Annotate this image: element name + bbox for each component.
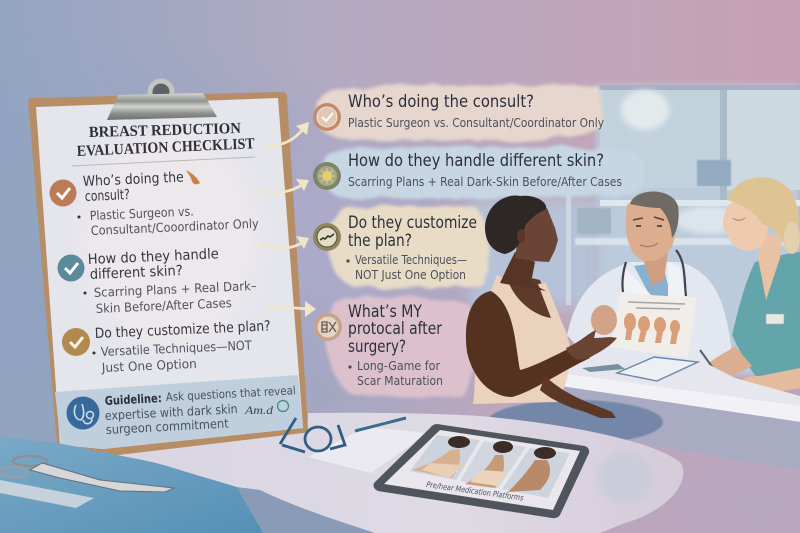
guideline: Am.d (244, 403, 274, 417)
blue surgical cloth (0, 437, 263, 533)
item: consult (50, 170, 260, 238)
item: skin: different skin? (89, 263, 183, 283)
item: customize: Do they customize the plan? (94, 318, 271, 342)
name badge (766, 314, 784, 324)
text: Scarring Plans + Real Dark-Skin Before/After Cases (348, 174, 622, 189)
illustration: patient (466, 196, 663, 444)
guideline band (55, 375, 303, 449)
bullet text (346, 252, 467, 282)
icon: wave badge (313, 223, 341, 251)
item: skin: Scarring Plans + Real Dark– (93, 278, 257, 300)
clipboard board (28, 92, 308, 460)
heading line two: protocal after (348, 319, 442, 338)
item: skin (58, 246, 257, 316)
surgical scissors (0, 456, 174, 492)
item: skin: Skin Before/After Cases (95, 295, 232, 316)
guideline: surgeon commitment (105, 416, 229, 437)
guideline: Guideline: (104, 391, 162, 408)
arrow 2 (260, 179, 309, 192)
item: customize (62, 318, 271, 375)
clipboard paper (36, 98, 303, 449)
title: BREAST REDUCTION (89, 120, 241, 141)
heading: Do they customize (348, 213, 477, 232)
clipboard (28, 81, 308, 460)
gauze (0, 480, 94, 508)
bullet text: Scar Maturation (357, 373, 443, 388)
illustration: nurse (700, 177, 800, 396)
illustration: doctor (567, 192, 732, 372)
illustration: anatomical chart (591, 293, 697, 358)
item: customize: Just One Option (101, 356, 197, 375)
icon: sun badge (313, 162, 341, 190)
title (76, 120, 256, 160)
reading glasses (280, 418, 345, 452)
arrow 3 (260, 236, 309, 249)
panel: who's doing the consult (313, 85, 605, 140)
bullet text (348, 358, 443, 388)
bullet text: Versatile Techniques— (355, 252, 467, 267)
hospital room background (470, 85, 800, 375)
item: consult: Plastic Surgeon vs. (89, 203, 194, 223)
heading: Who’s doing the consult? (348, 92, 534, 111)
panel: protocol after surgery (314, 296, 475, 397)
heading line three: surgery? (348, 337, 406, 356)
title: EVALUATION CHECKLIST (76, 135, 256, 160)
note paper (308, 427, 428, 473)
panel: different skin (313, 146, 645, 199)
item: customize: Versatile Techniques—NOT (100, 337, 252, 359)
arrow 4 (267, 301, 316, 317)
tablet (374, 424, 589, 518)
tablet caption: Pre/hear Medication Platforms (426, 480, 524, 503)
panel: customize the plan (313, 206, 488, 288)
heading: How do they handle different skin? (348, 151, 604, 170)
guideline: Ask questions that reveal (165, 383, 296, 404)
item: consult: Who’s doing the (82, 170, 184, 190)
bullet text: Long-Game for (357, 358, 441, 373)
item: consult: consult? (84, 187, 130, 205)
illustration: foreground table (116, 413, 683, 533)
before/after photos (410, 435, 570, 498)
pen (355, 418, 406, 431)
guideline (66, 383, 296, 437)
arrow 1 (267, 122, 309, 146)
bullet text: NOT Just One Option (355, 267, 466, 282)
icon: check badge (313, 103, 341, 131)
heading: What’s MY (348, 302, 423, 321)
illustration: desk (556, 354, 800, 470)
item: skin: How do they handle (87, 246, 219, 268)
icon: stethoscope (66, 396, 100, 430)
clip (107, 81, 217, 120)
heading line two: the plan? (348, 231, 412, 250)
guideline: expertise with dark skin (104, 401, 238, 423)
text: Plastic Surgeon vs. Consultant/Coordinator Only (348, 115, 605, 130)
item: consult: Consultant/Cooordinator Only (90, 216, 260, 238)
icon: grid badge (314, 313, 342, 341)
